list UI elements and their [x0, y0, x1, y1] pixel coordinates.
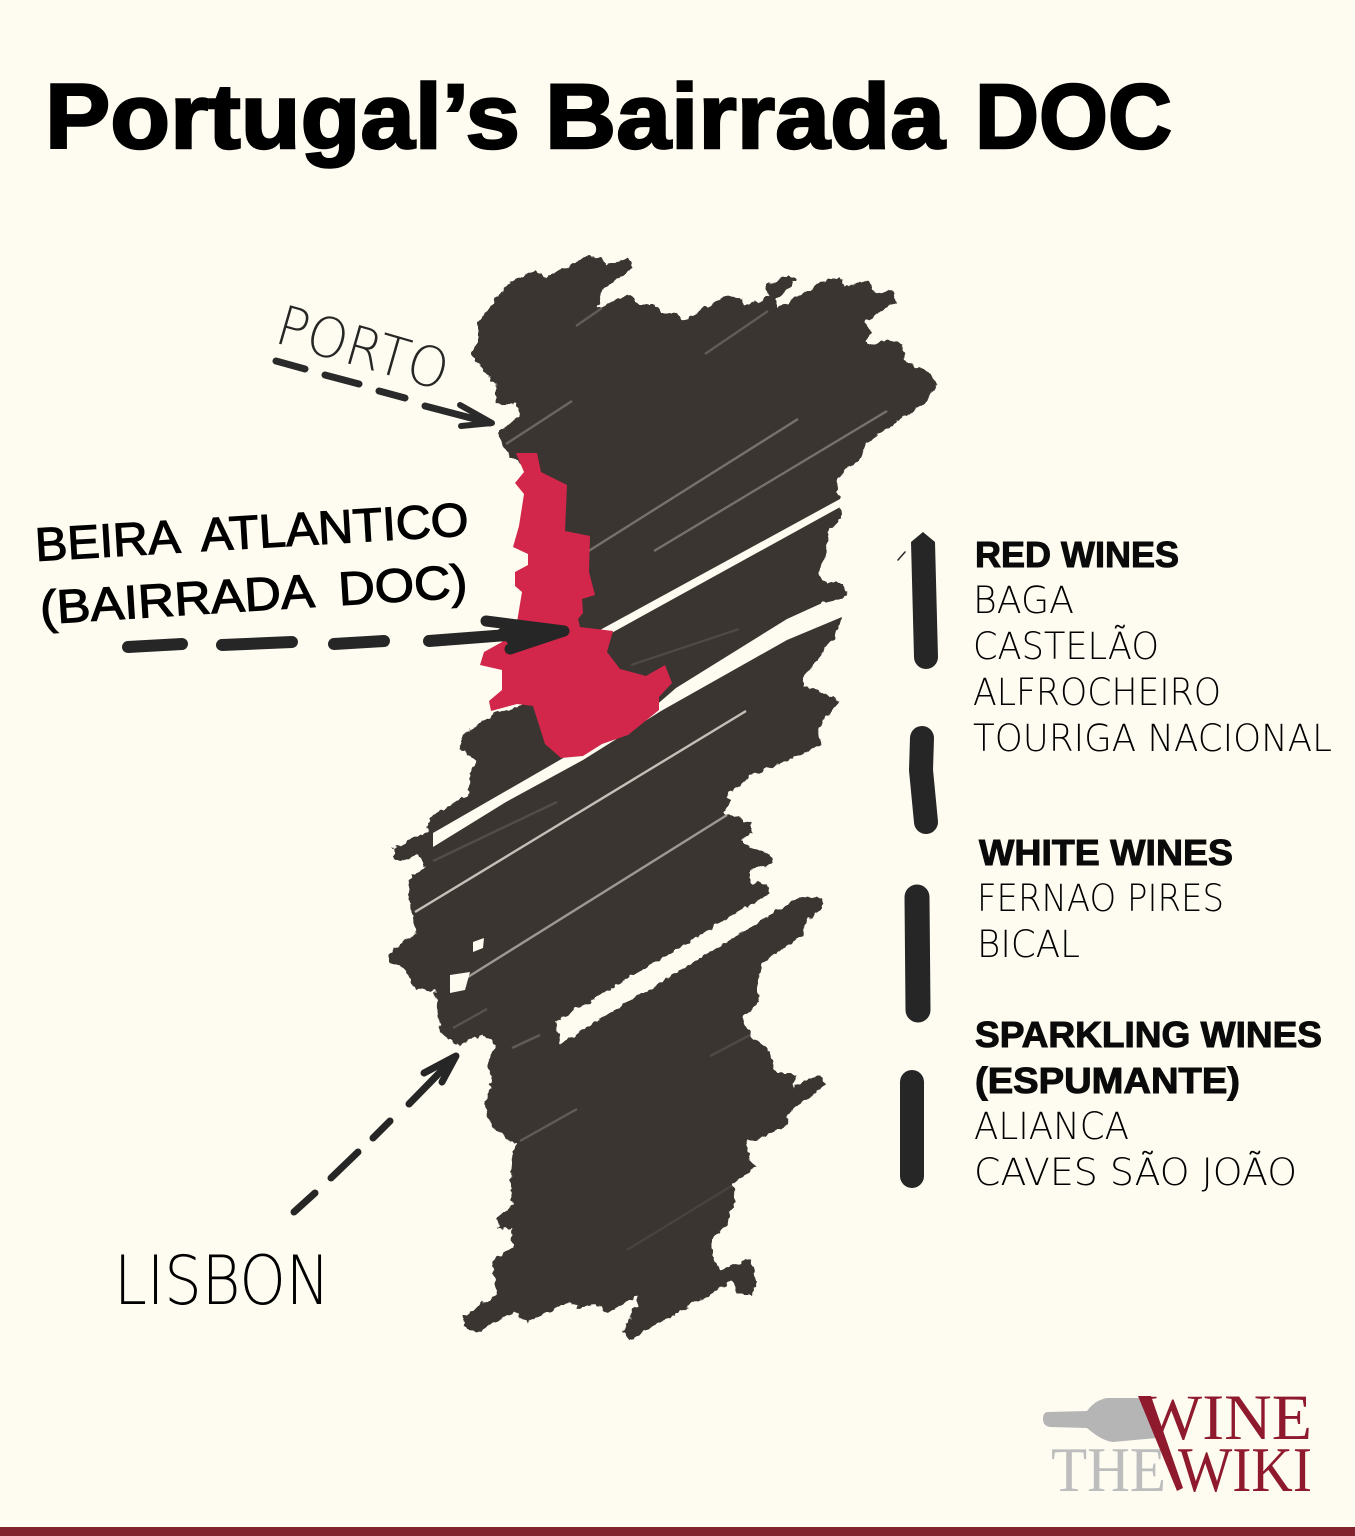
list: white wines: WHITE WINES: [979, 832, 1233, 873]
list: white wines: [977, 832, 1233, 966]
arrow: Bairrada: [128, 621, 564, 649]
list: white wines: FERNAO PIRES: [977, 877, 1224, 920]
list: red wines: RED WINES: [975, 534, 1179, 575]
label: Porto: PORTO: [269, 293, 456, 403]
title: Portugal’s: [45, 66, 520, 168]
vertical dashed divider: [898, 532, 938, 1176]
label: Lisbon: LISBON: [114, 1242, 330, 1321]
logo: The Wine Wiki: [1043, 1382, 1312, 1505]
label: Beira Atlantico (Bairrada DOC): (BAIRRADA DOC): [38, 554, 469, 634]
list: red wines: [973, 534, 1332, 760]
list: red wines: ALFROCHEIRO: [973, 671, 1221, 714]
arrow: Lisbon: [294, 1056, 456, 1212]
label: Beira Atlantico (Bairrada DOC): BEIRA ATLANTICO: [33, 492, 470, 571]
list: sparkling wines: (ESPUMANTE): [975, 1060, 1240, 1101]
map: thin scribble strokes: [415, 308, 887, 1250]
icon: wine bottle: [1043, 1398, 1157, 1442]
title: DOC: [975, 66, 1172, 168]
map: dark scribble silhouette: [390, 256, 937, 1340]
list: sparkling wines: CAVES SÃO JOÃO: [974, 1151, 1297, 1194]
logo: The Wine Wiki: THE: [1051, 1434, 1166, 1505]
arrow: Porto: [276, 361, 492, 426]
logo: The Wine Wiki: WINE: [1140, 1382, 1312, 1454]
logo: The Wine Wiki: WIKI: [1178, 1434, 1312, 1505]
footer bar: [0, 1527, 1355, 1536]
list: red wines: CASTELÃO: [973, 625, 1159, 668]
map: Bairrada region in red: [480, 453, 672, 758]
title: [45, 66, 1172, 168]
list: red wines: TOURIGA NACIONAL: [973, 717, 1332, 760]
list: sparkling wines: [974, 1014, 1322, 1194]
list: white wines: BICAL: [977, 923, 1080, 966]
map of Portugal: [390, 256, 937, 1340]
map: light scribble gaps: [433, 499, 845, 993]
list: sparkling wines: ALIANCA: [974, 1105, 1129, 1148]
list: sparkling wines: SPARKLING WINES: [975, 1014, 1322, 1055]
label: Beira Atlantico (Bairrada DOC): [33, 492, 470, 634]
title: Bairrada: [545, 66, 946, 168]
list: red wines: BAGA: [973, 579, 1074, 622]
